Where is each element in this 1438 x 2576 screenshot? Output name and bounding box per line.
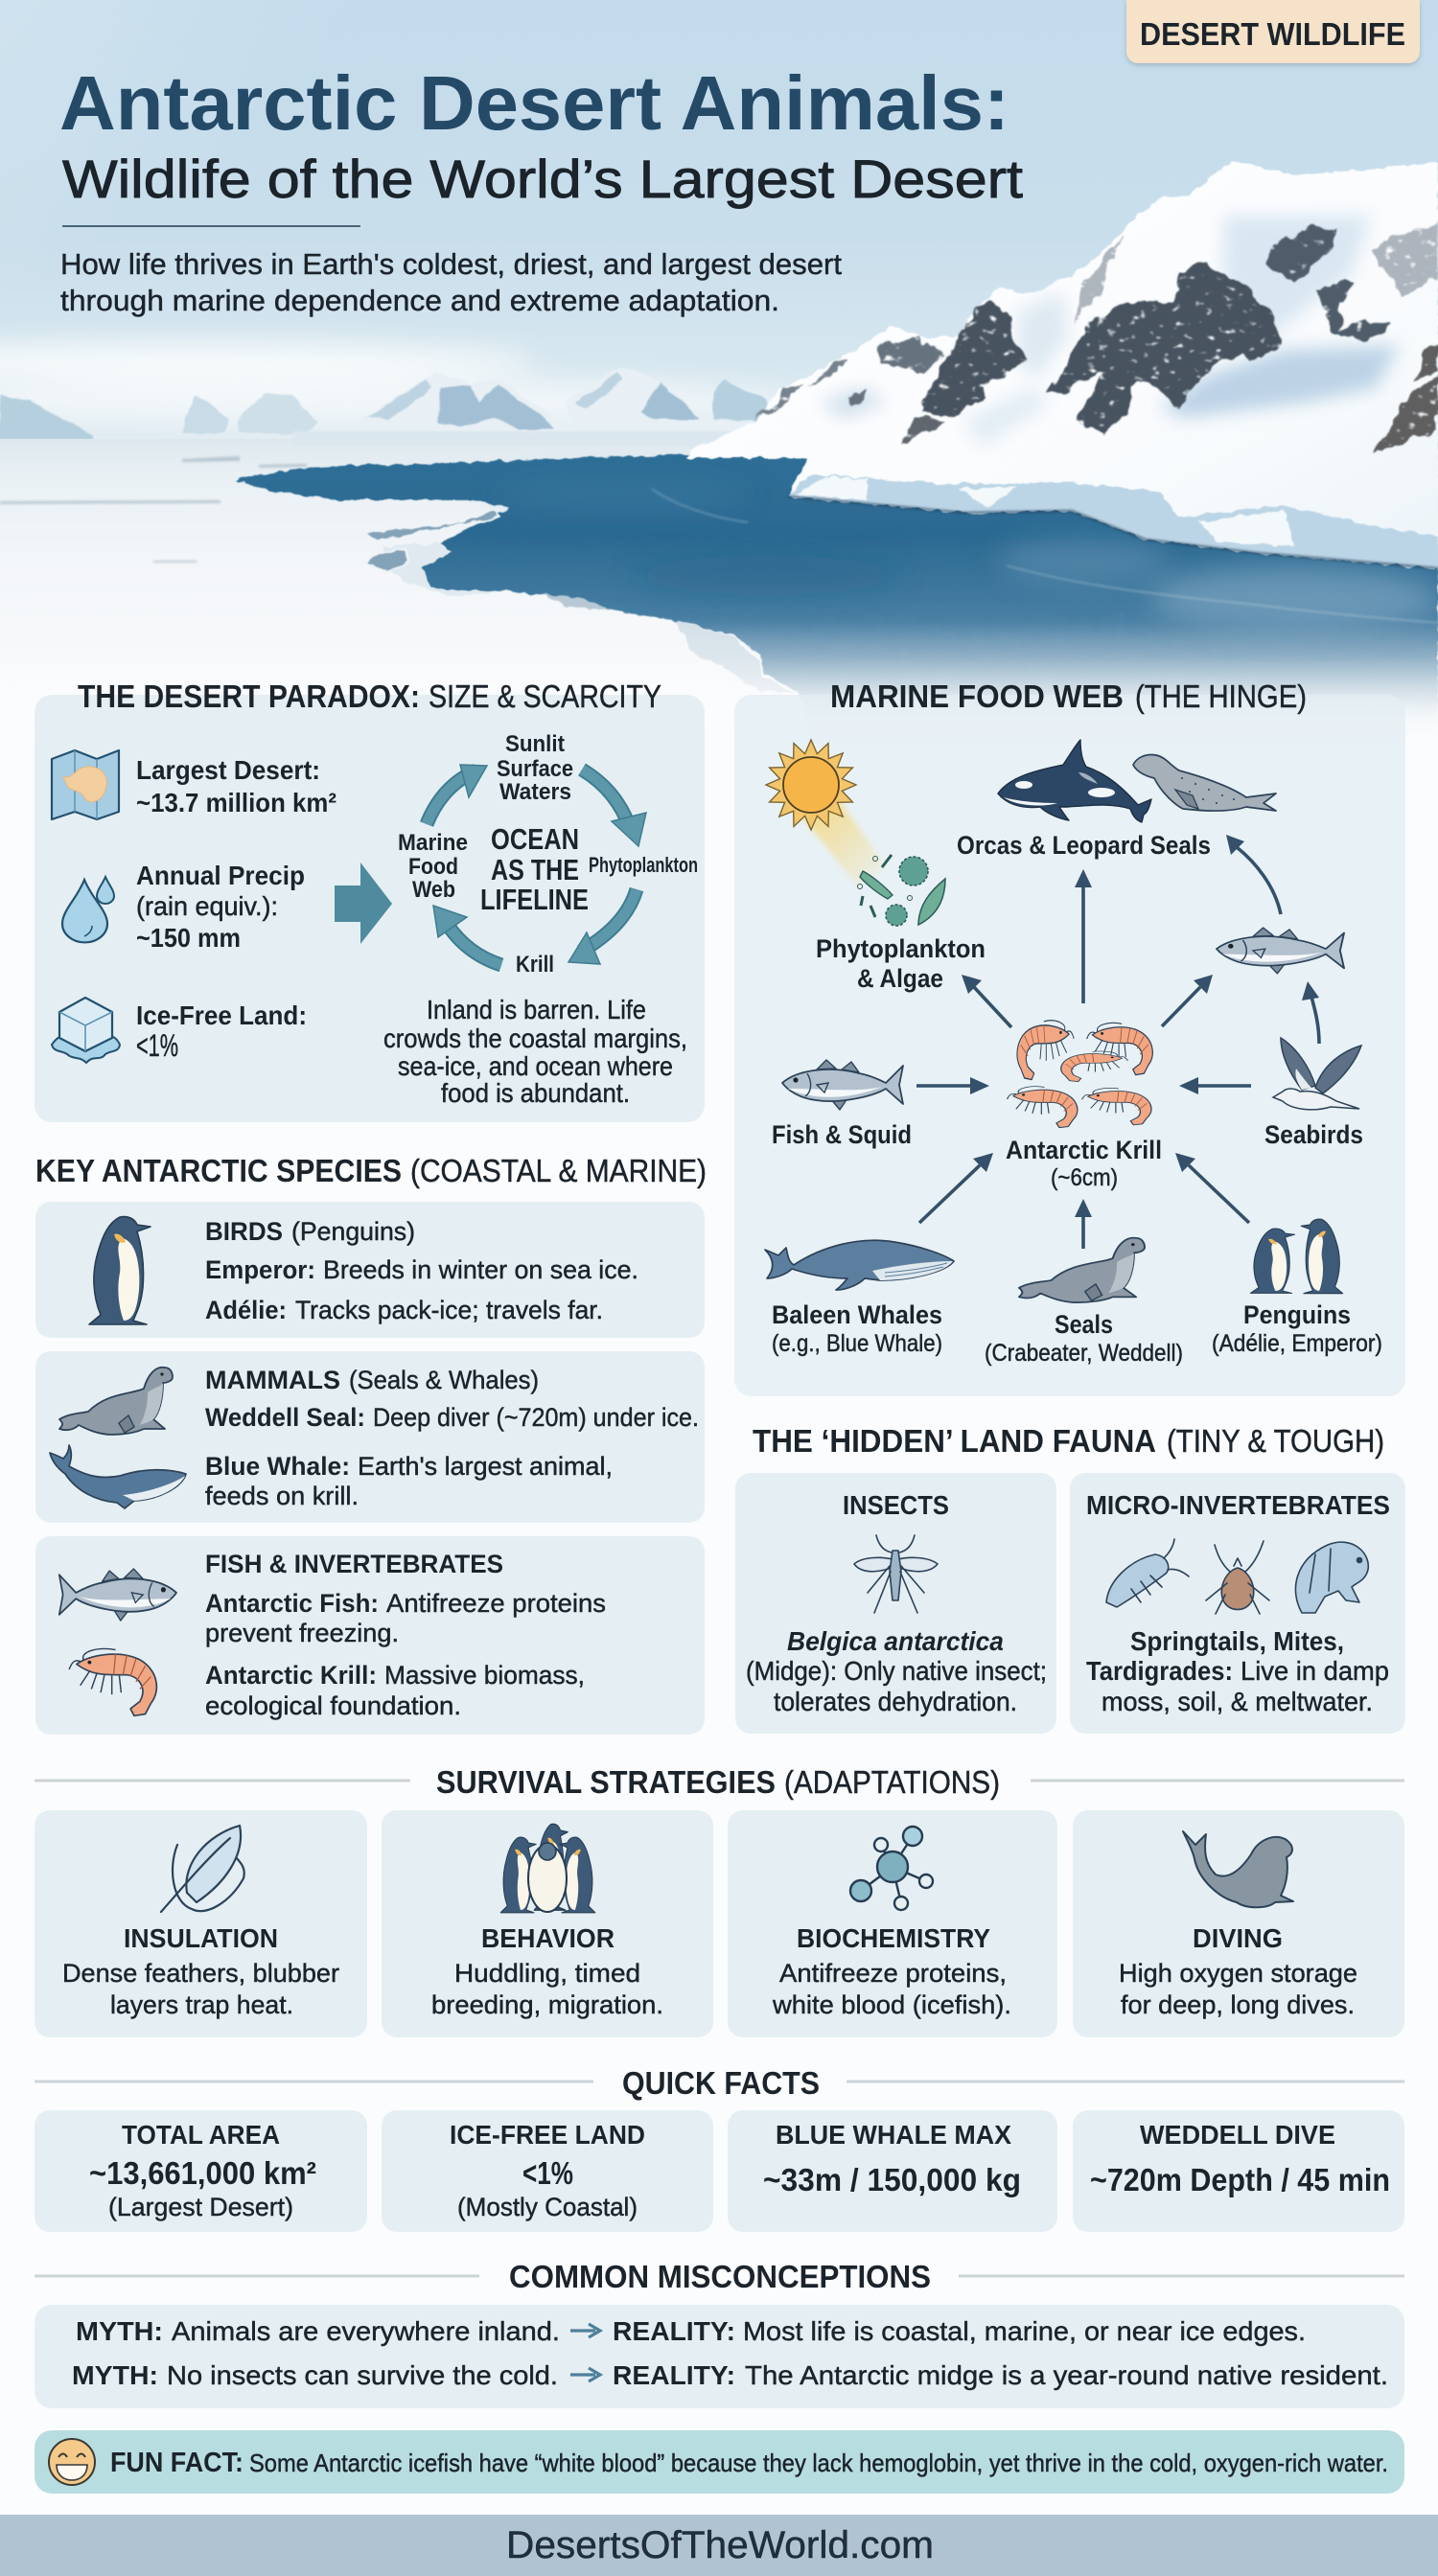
footer: DesertsOfTheWorld.com <box>506 2524 934 2566</box>
cycle centre: ocean as the lifeline: LIFELINE <box>480 883 589 916</box>
fact card: weddell dive: ~720m Depth / 45 min <box>1090 2162 1390 2197</box>
hero: blue snow shadows <box>820 216 1400 446</box>
label: baleen whales: Baleen Whales <box>772 1300 942 1329</box>
label: seabirds: Seabirds <box>1264 1120 1363 1149</box>
icon: feather <box>161 1826 244 1912</box>
cycle label: marine food web <box>398 830 468 903</box>
subtitle text: How life thrives in Earth's coldest, driest, and largest desert <box>60 247 842 281</box>
text: fish and invertebrates <box>205 1550 606 1720</box>
icon: krill swarm <box>1007 1021 1152 1128</box>
row: myth one: MYTH: <box>76 2316 163 2346</box>
heading: hidden land fauna: (TINY & TOUGH) <box>1167 1423 1384 1459</box>
text: diving: DIVING <box>1193 1923 1283 1953</box>
subtitle text: through marine dependence and extreme adaptation. <box>60 284 779 317</box>
text: birds: Tracks pack-ice; travels far. <box>295 1296 603 1324</box>
icon: laughing face <box>49 2439 95 2485</box>
label: baleen whales: (e.g., Blue Whale) <box>772 1330 942 1357</box>
icon: emperor penguin <box>89 1217 151 1324</box>
arrow: krill to phytoplankton <box>962 975 1011 1027</box>
hero: sea ice <box>0 439 1438 746</box>
text: belgica antarctica: tolerates dehydration. <box>774 1687 1017 1716</box>
stat: largest desert: Largest Desert: <box>136 755 320 785</box>
heading: marine food web: MARINE FOOD WEB <box>830 678 1124 714</box>
text: inland is barren <box>383 995 687 1108</box>
icon: mite <box>1206 1541 1269 1614</box>
cycle label: sunlit surface waters: Sunlit <box>505 731 565 757</box>
text: insulation <box>62 1923 339 2019</box>
heading: survival strategies: (ADAPTATIONS) <box>784 1764 1000 1800</box>
cycle centre: ocean as the lifeline: AS THE <box>491 853 579 886</box>
text: diving <box>1119 1923 1357 2019</box>
heading: quick facts: QUICK FACTS <box>622 2065 820 2101</box>
hero: open water <box>235 452 1438 746</box>
text: mammals <box>205 1366 699 1510</box>
row: myth two: The Antarctic midge is a year-round native resident. <box>745 2360 1388 2390</box>
icon: weddell seal <box>59 1368 173 1435</box>
label: seals: (Crabeater, Weddell) <box>985 1340 1183 1367</box>
heading: desert paradox <box>78 678 661 714</box>
panel: insulation <box>35 1810 367 2037</box>
text: inland is barren: sea-ice, and ocean where <box>398 1051 673 1081</box>
arrow: big right arrow <box>335 862 392 944</box>
heading: desert paradox: SIZE & SCARCITY <box>429 678 661 714</box>
panel: biochemistry <box>728 1810 1057 2037</box>
fact card: ice-free land <box>382 2110 713 2232</box>
stat: largest desert: ~13.7 million km² <box>136 788 336 817</box>
row: myth one: REALITY: <box>613 2316 735 2346</box>
arrow: seals to krill <box>1075 1199 1092 1249</box>
text: fish and invertebrates: Antarctic Fish: <box>205 1589 379 1618</box>
icon: blue whale <box>50 1445 186 1508</box>
stat: largest desert <box>136 755 336 817</box>
arrow: fish to orcas <box>1226 835 1281 914</box>
hero photo: Antarctic coast <box>0 0 1438 749</box>
text: insulation: INSULATION <box>124 1923 278 1953</box>
row: myth two: REALITY: <box>613 2360 735 2390</box>
text: mammals: Blue Whale: <box>205 1452 350 1481</box>
fact card: total area: ~13,661,000 km² <box>89 2155 316 2191</box>
text: biochemistry: Antifreeze proteins, <box>779 1959 1007 1988</box>
panel: insects <box>735 1473 1056 1734</box>
arrow: fish and squid to krill <box>916 1077 989 1094</box>
icon: leopard seal <box>1133 754 1276 811</box>
heading: key antarctic species: (COASTAL & MARINE) <box>410 1153 707 1188</box>
stat: ice-free land: Ice-Free Land: <box>136 1000 307 1030</box>
arrow: seabirds to krill <box>1179 1077 1251 1094</box>
text: fish and invertebrates: Antarctic Krill: <box>205 1661 377 1690</box>
label: seals <box>985 1310 1183 1367</box>
stat: ice-free land <box>136 1000 307 1063</box>
badge: desert wildlife <box>1126 0 1420 63</box>
cycle centre: ocean as the lifeline <box>480 822 589 916</box>
fact card: ice-free land: ICE-FREE LAND <box>450 2120 645 2150</box>
row: myth two: No insects can survive the cold. <box>167 2360 558 2390</box>
diagram: ocean lifeline cycle <box>398 731 698 978</box>
text: springtails mites tardigrades: Springtails, Mites, <box>1130 1626 1344 1656</box>
panel: diving <box>1073 1810 1404 2037</box>
row: myth one: Most life is coastal, marine, or near ice edges. <box>743 2316 1306 2346</box>
text: belgica antarctica: Belgica antarctica <box>787 1626 1004 1656</box>
stat: annual precipitation: Annual Precip <box>136 861 305 890</box>
icon: springtail <box>1106 1539 1189 1607</box>
label: antarctic krill: (~6cm) <box>1051 1164 1118 1191</box>
label: antarctic krill <box>1006 1136 1162 1191</box>
text: birds: Emperor: <box>205 1255 315 1284</box>
text: springtails mites tardigrades: moss, soil, & meltwater. <box>1102 1687 1373 1716</box>
text: inland is barren: Inland is barren. Life <box>427 995 646 1024</box>
panel: behavior <box>382 1810 713 2037</box>
fact card: blue whale max: ~33m / 150,000 kg <box>763 2162 1021 2197</box>
label: fish and squid: Fish & Squid <box>772 1120 912 1149</box>
label: phytoplankton and algae <box>816 934 986 993</box>
text: birds: Breeds in winter on sea ice. <box>323 1255 638 1284</box>
cycle label: sunlit surface waters: Surface <box>497 756 573 782</box>
stat: annual precipitation <box>136 861 305 953</box>
text: biochemistry: BIOCHEMISTRY <box>797 1923 990 1953</box>
text: mammals: feeds on krill. <box>205 1482 359 1510</box>
icon: baleen whale <box>765 1240 954 1290</box>
icon: orca <box>998 740 1151 822</box>
heading: survival strategies: SURVIVAL STRATEGIES <box>436 1764 776 1800</box>
hero: fade to page <box>0 623 1438 749</box>
heading: insects: INSECTS <box>843 1490 949 1520</box>
row: myth one: Animals are everywhere inland. <box>172 2316 560 2346</box>
title: Wildlife of the World’s Largest Desert <box>62 149 1023 209</box>
cycle label: sunlit surface waters <box>497 731 573 805</box>
text: mammals: Earth's largest animal, <box>358 1452 613 1481</box>
arrow: penguins to krill <box>1175 1153 1249 1223</box>
stat: annual precipitation: (rain equiv.): <box>136 891 278 921</box>
icon: antarctic fish <box>59 1569 176 1621</box>
cycle label: krill: Krill <box>516 952 554 978</box>
icon: sun <box>766 740 856 830</box>
panel: myths and realities <box>35 2305 1404 2408</box>
icon: penguins <box>1250 1219 1343 1294</box>
text: fish and invertebrates: FISH & INVERTEBRATES <box>205 1550 503 1578</box>
fact card: weddell dive: WEDDELL DIVE <box>1140 2120 1335 2150</box>
icon: antarctic krill <box>69 1648 156 1715</box>
text: belgica antarctica <box>746 1626 1047 1716</box>
text: birds: Adélie: <box>205 1296 287 1324</box>
text: inland is barren: food is abundant. <box>441 1078 630 1108</box>
text: behavior: breeding, migration. <box>431 1990 663 2019</box>
text: mammals: Deep diver (~720m) under ice. <box>373 1403 699 1432</box>
text: birds <box>205 1217 638 1324</box>
panel: mammals <box>35 1351 705 1523</box>
text: biochemistry: white blood (icefish). <box>772 1990 1011 2019</box>
icon: phytoplankton <box>857 855 945 926</box>
hero: ice cliffs <box>788 474 1438 568</box>
arrow: krill to fish <box>1162 975 1213 1026</box>
hero: exposed rock <box>756 220 1438 453</box>
text: behavior <box>431 1923 663 2019</box>
badge: desert wildlife: DESERT WILDLIFE <box>1140 16 1405 52</box>
arrow: whales to krill <box>919 1153 993 1223</box>
heading: survival strategies <box>35 1764 1404 1800</box>
text: diving: for deep, long dives. <box>1121 1990 1355 2019</box>
text: belgica antarctica: (Midge): Only native insect; <box>746 1656 1047 1686</box>
fact card: blue whale max: BLUE WHALE MAX <box>776 2120 1011 2150</box>
footer <box>0 2515 1438 2576</box>
fact card: ice-free land: <1% <box>522 2155 573 2191</box>
heading: desert paradox: THE DESERT PARADOX: <box>78 678 420 714</box>
text: fish and invertebrates: Antifreeze proteins <box>386 1589 606 1618</box>
sunlight beam <box>800 800 887 886</box>
text: insulation: layers trap heat. <box>110 1990 293 2019</box>
text: birds: (Penguins) <box>291 1217 415 1246</box>
label: baleen whales <box>772 1300 942 1357</box>
icon: seabird <box>1273 1038 1361 1110</box>
text: mammals: Weddell Seal: <box>205 1403 365 1432</box>
text: mammals: (Seals & Whales) <box>349 1366 539 1394</box>
text: inland is barren: crowds the coastal margins, <box>383 1024 687 1053</box>
icon: diving seal <box>1183 1831 1293 1907</box>
panel: micro-invertebrates <box>1070 1473 1405 1734</box>
text: springtails mites tardigrades: Live in damp <box>1241 1656 1389 1686</box>
panel: desert paradox <box>35 678 705 1122</box>
heading: key antarctic species: KEY ANTARCTIC SPECIES <box>35 1153 402 1188</box>
arrow: seabirds to fish <box>1302 981 1319 1044</box>
text: springtails mites tardigrades: Tardigrades: <box>1086 1656 1233 1686</box>
stat: annual precipitation: ~150 mm <box>136 923 241 953</box>
hero: main snowy mountain <box>685 161 1438 568</box>
fact card: total area: TOTAL AREA <box>122 2120 280 2150</box>
cycle label: marine food web: Marine <box>398 830 468 856</box>
heading: micro-invertebrates: MICRO-INVERTEBRATES <box>1086 1490 1390 1520</box>
icon: tardigrade <box>1295 1542 1368 1613</box>
label: phytoplankton and algae: & Algae <box>857 964 943 993</box>
text: springtails mites tardigrades <box>1086 1626 1389 1716</box>
fact card: weddell dive <box>1073 2110 1404 2232</box>
row: myth one <box>76 2316 1306 2346</box>
heading: marine food web <box>830 678 1307 714</box>
text: diving: High oxygen storage <box>1119 1959 1357 1988</box>
row: myth two: MYTH: <box>72 2360 158 2390</box>
label: seals: Seals <box>1055 1310 1113 1339</box>
icon: map of Antarctica <box>52 750 119 819</box>
callout: fun fact: FUN FACT: <box>110 2448 244 2478</box>
hero: ice tongue floes <box>364 510 796 695</box>
panel: birds <box>35 1202 705 1338</box>
text: fish and invertebrates: Massive biomass, <box>384 1661 585 1690</box>
text: birds: BIRDS <box>205 1217 283 1246</box>
callout: fun fact <box>35 2430 1404 2494</box>
icon: seal <box>1019 1238 1145 1302</box>
arrow: krill to orcas <box>1075 869 1092 1003</box>
fact card: total area: (Largest Desert) <box>108 2193 293 2221</box>
fact card: total area <box>35 2110 367 2232</box>
icon: small fish <box>1217 928 1344 974</box>
icon: huddling penguins <box>500 1824 595 1913</box>
subtitle text <box>60 225 842 317</box>
cycle label: marine food web: Food <box>408 854 458 880</box>
text: behavior: BEHAVIOR <box>481 1923 615 1953</box>
fact card: blue whale max <box>728 2110 1057 2232</box>
label: penguins: (Adélie, Emperor) <box>1212 1330 1382 1357</box>
cycle label: marine food web: Web <box>412 877 455 903</box>
text: fish and invertebrates: prevent freezing. <box>205 1619 399 1647</box>
icon: molecule <box>850 1827 933 1910</box>
title: Antarctic Desert Animals: <box>59 60 1009 146</box>
fact card: ice-free land: (Mostly Coastal) <box>457 2193 638 2221</box>
stat: ice-free land: <1% <box>136 1028 178 1063</box>
row: myth two <box>72 2360 1388 2390</box>
icon: fish and squid <box>782 1060 903 1110</box>
cycle centre: ocean as the lifeline: OCEAN <box>491 822 579 856</box>
cycle label: sunlit surface waters: Waters <box>499 779 571 805</box>
icon: ice cube <box>52 998 120 1063</box>
heading: hidden land fauna: THE ‘HIDDEN’ LAND FAUNA <box>753 1423 1156 1459</box>
text: fish and invertebrates: ecological foundation. <box>205 1691 461 1720</box>
text: insulation: Dense feathers, blubber <box>62 1959 339 1988</box>
cycle label: phytoplankton: Phytoplankton <box>589 853 698 877</box>
heading: marine food web: (THE HINGE) <box>1135 678 1307 714</box>
label: penguins: Penguins <box>1243 1300 1351 1329</box>
label: phytoplankton and algae: Phytoplankton <box>816 934 986 963</box>
panel: fish and invertebrates <box>35 1536 705 1735</box>
label: antarctic krill: Antarctic Krill <box>1006 1136 1162 1164</box>
heading: hidden land fauna <box>753 1423 1384 1459</box>
text: mammals: MAMMALS <box>205 1366 340 1394</box>
icon: water drops <box>62 877 114 942</box>
panel: marine food web <box>734 678 1405 1396</box>
title <box>59 60 1023 209</box>
text: behavior: Huddling, timed <box>454 1959 640 1988</box>
icon: midge <box>854 1535 938 1613</box>
heading: common misconceptions: COMMON MISCONCEPTIONS <box>509 2259 931 2294</box>
heading: key antarctic species <box>35 1153 707 1188</box>
label: penguins <box>1212 1300 1382 1357</box>
label: orcas and leopard seals: Orcas & Leopard Seals <box>957 831 1211 860</box>
text: biochemistry <box>772 1923 1011 2019</box>
